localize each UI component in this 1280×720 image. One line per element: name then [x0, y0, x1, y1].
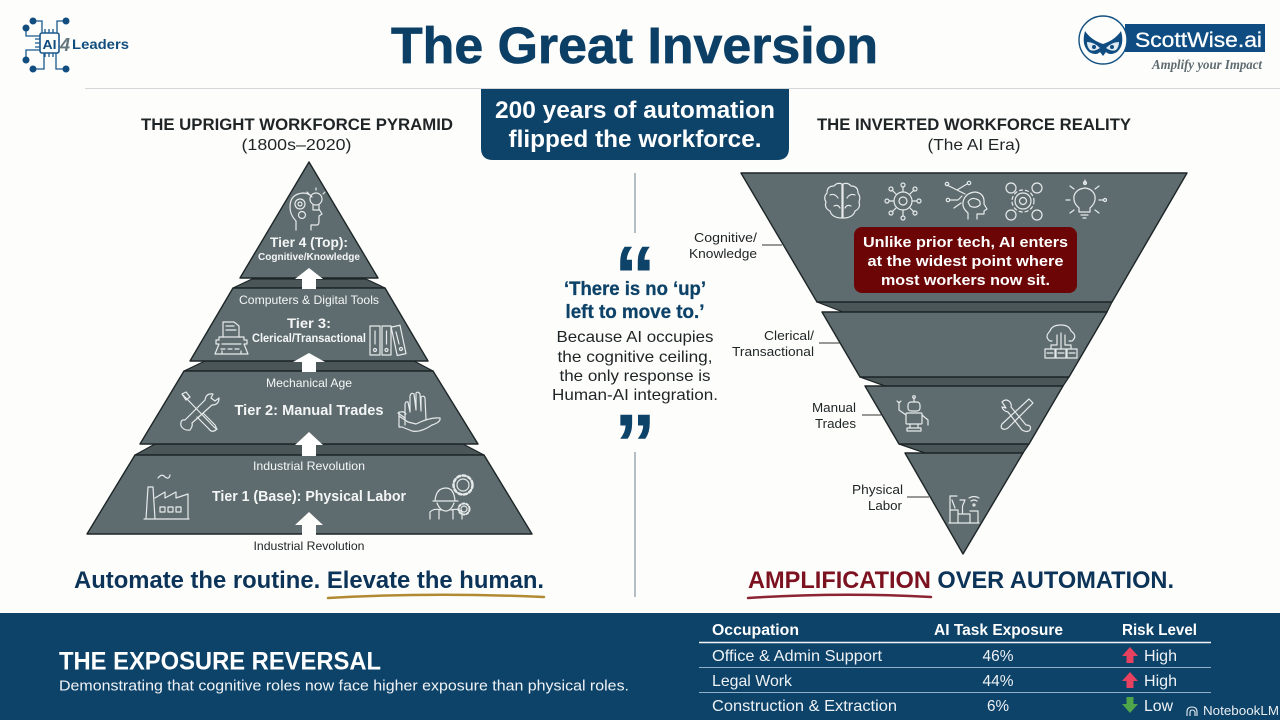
quote body: Human-AI integration.: [552, 387, 718, 404]
label: manual trades: Manual: [812, 401, 856, 415]
row: construction and extraction: 6%: [987, 698, 1009, 715]
label: physical labor: Labor: [868, 499, 902, 513]
slogan: automate the routine: Automate the routine. Elevate the human.: [74, 567, 544, 594]
inverted pyramid: [741, 173, 1187, 554]
row: construction and extraction: [712, 697, 1173, 715]
arrow: tier 3 to 4: [295, 268, 323, 289]
icon: closing quote: ”: [614, 397, 656, 491]
quote body: Because AI occupies: [556, 329, 714, 346]
label: clerical transactional: [732, 329, 840, 359]
divider upper: [634, 173, 636, 233]
logo: AI4Leaders: Leaders: [72, 37, 129, 52]
upright pyramid: [87, 162, 532, 535]
quote headline: ‘There is no ‘up’: [564, 279, 706, 300]
icon: network brain: [885, 183, 921, 220]
banner: 200 years of automation: flipped the workforce.: [508, 126, 762, 153]
arrow: entry to base: [295, 512, 323, 535]
row: legal work: Legal Work: [712, 673, 793, 690]
logo: ScottWise.ai: [1079, 16, 1265, 72]
icon: cloud servers: [1045, 325, 1077, 358]
quote body: the only response is: [560, 368, 710, 385]
label: physical labor: Physical: [852, 483, 903, 497]
callout: widest point: Unlike prior tech, AI enters: [863, 234, 1068, 251]
heading: upright pyramid: THE UPRIGHT WORKFORCE PYRAMID: [141, 115, 453, 134]
tier 4: cognitive: [240, 162, 378, 278]
arrow: base to tier 2: [295, 432, 323, 456]
label: physical labor: [852, 483, 929, 513]
label: industrial revolution below pyramid: Industrial Revolution: [254, 539, 364, 553]
heading: inverted reality: [817, 115, 1132, 154]
label: industrial revolution: Industrial Revolution: [253, 459, 365, 473]
label: clerical transactional: Clerical/: [764, 329, 815, 343]
heading: the exposure reversal: THE EXPOSURE REVERSAL: [59, 648, 381, 676]
label: mechanical age: Mechanical Age: [266, 376, 352, 390]
label: cognitive knowledge: Cognitive/Knowledge: [258, 251, 360, 263]
label: tier 3: Tier 3:: [287, 315, 331, 331]
table header: [699, 622, 1211, 642]
icon: opening quote: “: [614, 229, 656, 323]
heading: upright pyramid: [141, 115, 453, 154]
quote body: [552, 329, 718, 404]
heading: inverted reality: THE INVERTED WORKFORCE REALITY: [817, 115, 1132, 134]
icon: crossed tools: [1001, 399, 1033, 432]
table header: Occupation: [712, 622, 799, 639]
icon: brain: [825, 183, 860, 218]
label: manual trades: [812, 401, 881, 431]
row: office and admin support: 46%: [982, 648, 1014, 665]
arrow: tier 2 to 3: [293, 353, 325, 372]
heading: inverted reality: (The AI Era): [928, 137, 1020, 154]
tier 3: clerical: [190, 268, 428, 361]
label: computers and digital tools: Computers & Digital Tools: [239, 293, 379, 307]
banner: 200 years of automation: [481, 89, 789, 160]
table: occupation exposure: [699, 622, 1211, 715]
row: office and admin support: [699, 647, 1211, 668]
icon: smart factory: [949, 496, 979, 523]
callout: widest point: [854, 227, 1077, 293]
label: manual trades: Trades: [815, 417, 856, 431]
callout: widest point: at the widest point where: [868, 253, 1064, 270]
inverted tier: manual: [865, 386, 1063, 444]
label: cognitive knowledge: [689, 231, 782, 261]
quote headline: [564, 279, 706, 323]
inverted tier: physical: [905, 453, 1023, 554]
icon: typewriter: [215, 322, 248, 354]
title: The Great Inversion: [391, 17, 878, 74]
table header: Risk Level: [1122, 622, 1197, 639]
row: legal work: 44%: [982, 673, 1014, 690]
subheading: Demonstrating that cognitive roles now face higher exposure than physical roles.: [59, 678, 629, 694]
divider lower: [634, 452, 636, 597]
icon: factory: [144, 475, 189, 519]
badge: NotebookLM: NotebookLM: [1203, 703, 1279, 718]
icon: head with lightbulb: [290, 188, 325, 230]
panel: exposure reversal footer: [0, 613, 1280, 720]
tier 1: physical labor: [87, 432, 532, 535]
row: legal work: [699, 672, 1211, 692]
icon: lightbulb network: [1066, 180, 1106, 218]
icon: robot: [897, 396, 928, 431]
icon: crossed tools: [181, 392, 219, 431]
icon: hand: [398, 392, 440, 431]
logo: AI4Leaders: [22, 18, 129, 72]
row: legal work: High: [1144, 673, 1177, 690]
label: tier 1: Tier 1 (Base): Physical Labor: [212, 489, 406, 505]
heading: upright pyramid: (1800s–2020): [242, 137, 352, 154]
icon: binders: [370, 325, 406, 356]
label: tier 4: Tier 4 (Top):: [270, 234, 348, 250]
label: cognitive knowledge: Knowledge: [689, 247, 757, 261]
logo: AI4Leaders: AI: [42, 37, 56, 52]
icon: head with brain: [945, 181, 987, 219]
inverted tier: clerical: [822, 312, 1107, 377]
row: office and admin support: Office & Admin Support: [712, 648, 883, 665]
icon: worker and gears: [430, 476, 472, 519]
row: office and admin support: High: [1144, 648, 1177, 665]
label: clerical transactional: Clerical/Transactional: [252, 333, 366, 345]
quote headline: left to move to.’: [566, 302, 704, 323]
central quote: [552, 229, 718, 491]
quote body: the cognitive ceiling,: [558, 349, 712, 366]
logo: ScottWise.ai: Amplify your Impact: [1151, 57, 1263, 72]
row: construction and extraction: Low: [1144, 698, 1173, 715]
label: clerical transactional: Transactional: [732, 345, 814, 359]
callout: widest point: most workers now sit.: [881, 272, 1050, 289]
inverted tier: cognitive: [741, 173, 1187, 302]
label: cognitive knowledge: Cognitive/: [694, 231, 758, 245]
slogan: amplification over automation: AMPLIFICATION OVER AUTOMATION.: [748, 567, 1174, 594]
row: construction and extraction: Construction & Extraction: [712, 698, 897, 715]
logo: ScottWise.ai: ScottWise.ai: [1135, 29, 1262, 52]
icon: people network: [1006, 183, 1042, 220]
table header: AI Task Exposure: [934, 622, 1063, 639]
logo: AI4Leaders: 4: [59, 35, 70, 55]
banner: 200 years of automation: 200 years of automation: [495, 97, 775, 124]
label: tier 2: Tier 2: Manual Trades: [234, 403, 384, 419]
tier 2: manual trades: [140, 353, 478, 444]
